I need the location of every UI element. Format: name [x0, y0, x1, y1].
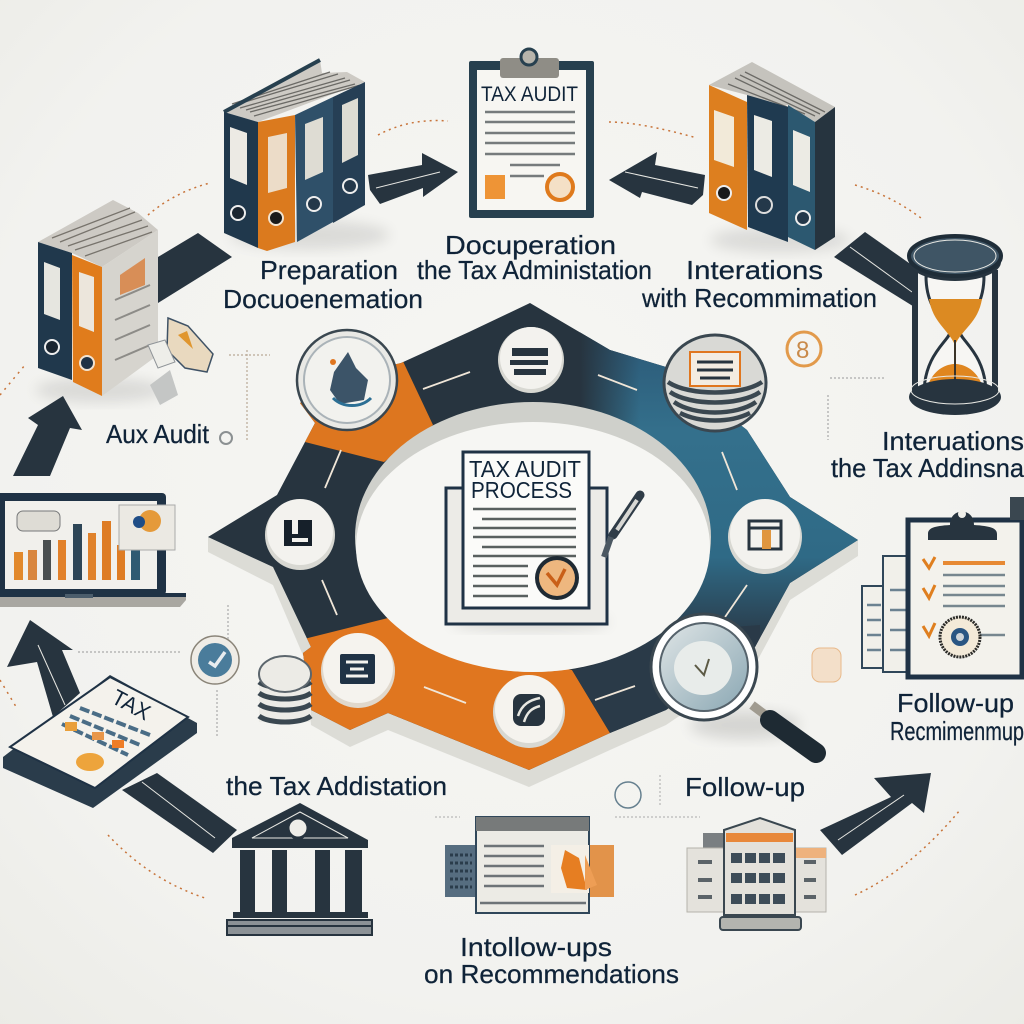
- arrow: binders to clipboard: [368, 153, 458, 204]
- clipboard: tax audit: TAX AUDIT: [481, 83, 578, 106]
- magnifying glass: [651, 614, 816, 753]
- label: docuperation: Docuperation: [445, 230, 616, 260]
- small decorative badges and dotted connectors: [0, 121, 960, 898]
- ring icon: bottom left: [321, 633, 395, 708]
- clipboard: tax audit: [469, 49, 594, 218]
- building: follow-up: [687, 818, 826, 930]
- label: aux audit: Aux Audit: [106, 419, 210, 449]
- ring icon: bottom: [493, 675, 565, 748]
- label: preparation: Preparation: [260, 255, 398, 285]
- ring icon: lens top left: [297, 330, 397, 430]
- ring icon: right: [728, 499, 802, 574]
- hourglass: [909, 236, 1001, 415]
- arrow: up to binders: [13, 396, 82, 476]
- arrow: tablet to bank: [122, 773, 237, 853]
- center document: tax audit process: PROCESS: [471, 477, 572, 503]
- label: documentation left: Docuoenemation: [223, 284, 423, 314]
- label: follow-up bottom: Follow-up: [685, 772, 805, 802]
- label: the tax administration top: the Tax Administation: [417, 255, 652, 285]
- label: on recommendations: on Recommendations: [424, 959, 679, 989]
- ring icon: top: [498, 327, 564, 393]
- center document: tax audit process: [446, 452, 640, 630]
- center document: tax audit process: TAX AUDIT: [469, 456, 581, 482]
- tax report tablet: [3, 675, 197, 808]
- clipboard: follow-up checklist: [862, 497, 1024, 677]
- bank building: [227, 803, 372, 935]
- label: follow-up right: Follow-up: [897, 688, 1014, 718]
- document panel: recommendations: [445, 817, 614, 913]
- arrow: binders to clipboard right: [609, 152, 705, 205]
- central process ring: [200, 295, 870, 790]
- binders: top right group: [709, 62, 850, 252]
- label: with recommimation: with Recommimation: [641, 283, 877, 313]
- label: the tax addistation: the Tax Addistation: [226, 771, 447, 801]
- small icon: blue badge: [191, 636, 239, 684]
- arrow: follow-up to clipboard: [820, 773, 931, 855]
- arrow: up from tablet to laptop: [7, 620, 80, 717]
- icon: crumpled paper: [148, 318, 213, 405]
- laptop with bar chart: [0, 493, 186, 607]
- label: intollow-ups: Intollow-ups: [460, 932, 612, 962]
- bar chart: [14, 521, 140, 580]
- arrow: to hourglass: [834, 232, 916, 308]
- label: interuations right: Interuations: [882, 426, 1024, 456]
- binders: top left group: [224, 60, 390, 251]
- small decorative badges and dotted connectors: 8: [796, 337, 809, 364]
- tax report tablet: TAX: [108, 684, 155, 725]
- ring icon: left: [265, 499, 335, 570]
- label: interations: Interations: [686, 255, 823, 285]
- ring icon: stacked lens top right: [664, 335, 766, 431]
- coin stack: [259, 656, 311, 722]
- binders: left group: [35, 200, 232, 402]
- label: the tax addinsna: the Tax Addinsna: [831, 453, 1024, 483]
